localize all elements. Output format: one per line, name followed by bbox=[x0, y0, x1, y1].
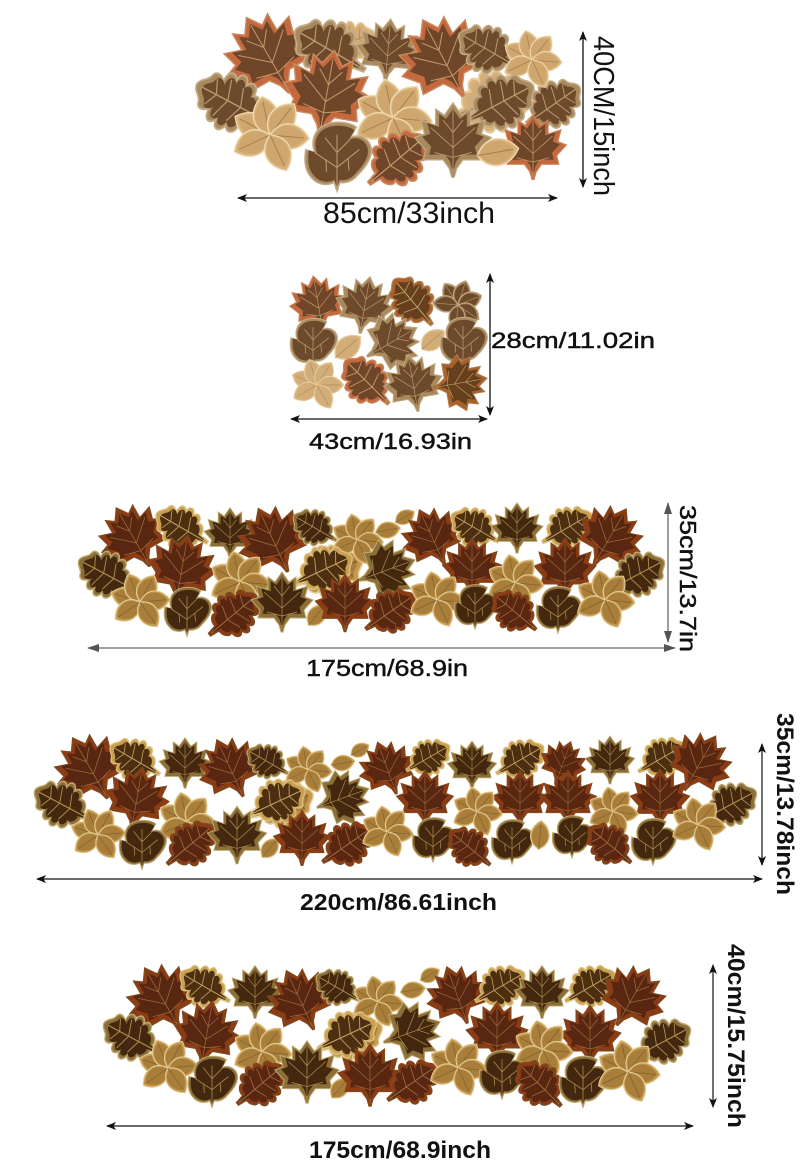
arrow: width 43cm bbox=[291, 418, 487, 420]
arrow: height 35cm bbox=[667, 503, 669, 642]
label: width: 43cm/16.93in bbox=[309, 429, 472, 454]
leaf runner 175 by 35 cm bbox=[68, 491, 675, 652]
leaf runner 85 by 40 cm bbox=[182, 0, 594, 205]
panel: 175cm runner, 40cm wide bbox=[93, 944, 749, 1164]
arrow: width 220cm bbox=[37, 878, 762, 880]
panel: 220cm runner bbox=[24, 713, 798, 915]
label: width: 175cm/68.9in bbox=[306, 655, 468, 681]
label: width: 85cm/33inch bbox=[323, 197, 495, 230]
arrow: height 40cm bbox=[582, 32, 584, 187]
label: height: 35cm/13.78inch bbox=[771, 713, 798, 895]
arrow: height 40cm bbox=[712, 965, 714, 1107]
arrow: width 85cm bbox=[238, 197, 557, 199]
panel: 175cm runner, 35cm wide bbox=[68, 491, 701, 681]
arrow: height 28cm bbox=[489, 274, 491, 415]
label: height: 40cm/15.75inch bbox=[722, 944, 749, 1128]
arrow: width 175cm bbox=[88, 647, 675, 649]
leaf placemat 43 by 28 cm bbox=[285, 265, 494, 420]
panel: placemat 43cm bbox=[285, 265, 655, 454]
leaf runner 220 by 35 cm bbox=[24, 720, 766, 881]
arrow: width 175cm bbox=[107, 1125, 693, 1127]
label: width: 220cm/86.61inch bbox=[300, 889, 497, 915]
label: width: 175cm/68.9inch bbox=[309, 1137, 491, 1164]
label: height: 35cm/13.7in bbox=[675, 505, 701, 652]
label: height: 28cm/11.02in bbox=[491, 328, 655, 353]
label: height: 40CM/15inch bbox=[587, 36, 619, 196]
panel: small 85cm runner bbox=[182, 0, 619, 230]
leaf runner 175 by 40 cm bbox=[93, 950, 701, 1122]
arrow: height 35cm bbox=[761, 744, 763, 865]
